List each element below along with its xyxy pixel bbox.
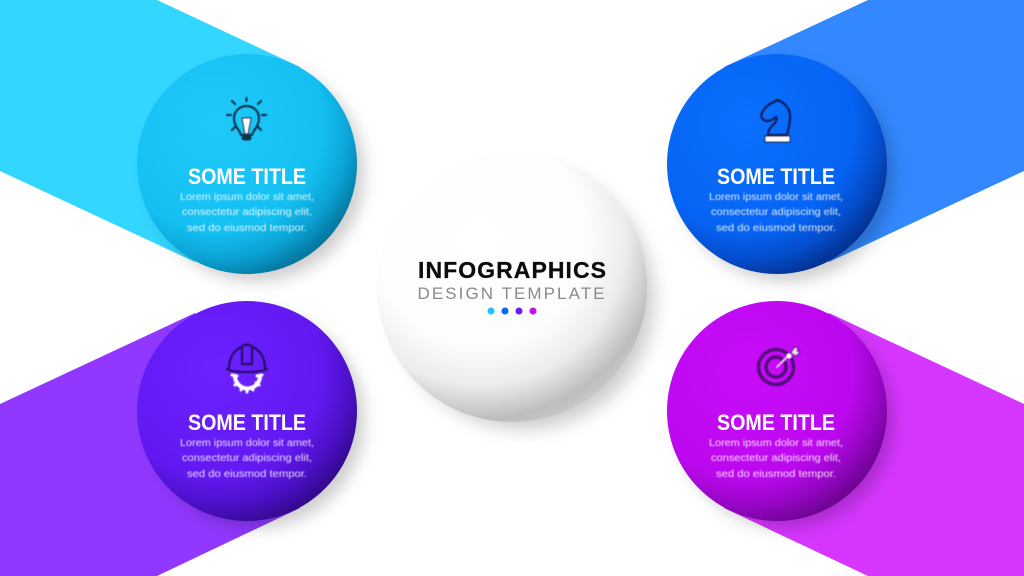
band: bottom left — [0, 313, 300, 576]
icon: helmet with gear — [227, 345, 267, 392]
icon: light bulb — [227, 98, 266, 138]
body text: sed do eiusmod tempor. — [187, 223, 307, 234]
body text — [180, 438, 314, 480]
body text: consectetur adipiscing elit, — [182, 207, 312, 218]
heading: INFOGRAPHICS — [418, 257, 606, 283]
body text: consectetur adipiscing elit, — [182, 453, 312, 464]
title: SOME TITLE — [717, 410, 835, 435]
body text: Lorem ipsum dolor sit amet, — [180, 192, 314, 203]
body text — [709, 192, 843, 234]
title: SOME TITLE — [717, 164, 835, 189]
body text: sed do eiusmod tempor. — [716, 469, 836, 480]
body text: sed do eiusmod tempor. — [187, 469, 307, 480]
body text: consectetur adipiscing elit, — [711, 207, 841, 218]
body text: Lorem ipsum dolor sit amet, — [709, 438, 843, 449]
icon: target with arrow — [758, 347, 800, 384]
band: bottom right — [724, 313, 1024, 576]
title: SOME TITLE — [188, 164, 306, 189]
body text: consectetur adipiscing elit, — [711, 453, 841, 464]
body text — [180, 192, 314, 234]
body text: sed do eiusmod tempor. — [716, 223, 836, 234]
central sphere — [377, 152, 654, 429]
subheading: DESIGN TEMPLATE — [418, 284, 604, 303]
panel: bottom left — [137, 301, 364, 528]
panel: top left — [137, 54, 364, 281]
band: top right — [724, 0, 1024, 262]
icon: chess knight — [761, 100, 790, 142]
body text: Lorem ipsum dolor sit amet, — [180, 438, 314, 449]
panel: bottom right — [667, 301, 894, 528]
colour dots — [488, 308, 536, 314]
body text: Lorem ipsum dolor sit amet, — [709, 192, 843, 203]
band: top left — [0, 0, 300, 262]
panel: top right — [667, 54, 894, 281]
title: SOME TITLE — [188, 410, 306, 435]
body text — [709, 438, 843, 480]
